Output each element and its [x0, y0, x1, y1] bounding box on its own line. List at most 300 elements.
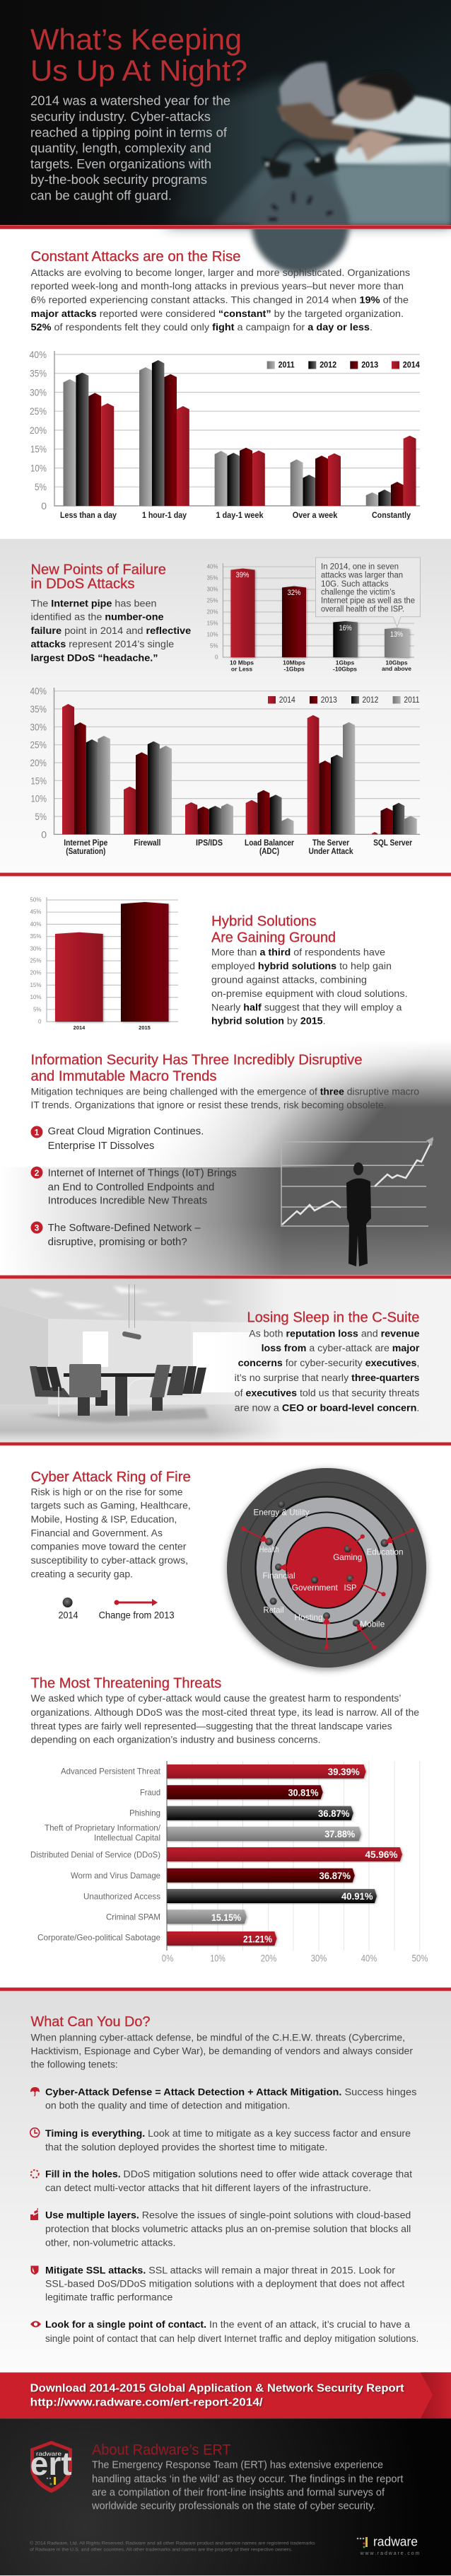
- hero photo: man awake in bed with alarm clock: [0, 0, 451, 274]
- text block: losing sleep: concerns for cyber-security executives,: [238, 1357, 419, 1368]
- bar: 10 Mbps to 1 Gbps, 32%: 32%: [287, 589, 301, 597]
- x axis labels: 2015: [139, 1024, 151, 1031]
- tenet 6: single point of contact: single point of contact that can help divert Internet traffic and deploy mitigation solutions.: [45, 2333, 418, 2344]
- hero intro text: [30, 93, 230, 202]
- y axis labels: 25%: [30, 405, 47, 417]
- y axis labels: 45%: [30, 909, 41, 916]
- x axis labels: (Saturation): [66, 848, 105, 856]
- hero intro text: reached a tipping point in terms of: [30, 125, 228, 139]
- tenet 3: fill in the holes: Fill in the holes. DDoS mitigation solutions need to offer wide attack coverage that: [45, 2168, 412, 2180]
- panel: download banner: [0, 2372, 451, 2418]
- tenet 4: multiple layers: [30, 2208, 411, 2248]
- y axis labels: [30, 897, 42, 1024]
- y axis labels: 40%: [30, 921, 41, 928]
- trend 2: [31, 1167, 237, 1207]
- bar: 10 Mbps to 1 Gbps, 32%: [282, 586, 306, 657]
- trend 1: Enterprise IT Dissolves: [48, 1140, 154, 1152]
- text block: ring of fire: Mobile, Hosting & ISP, Education,: [31, 1513, 177, 1525]
- text block: losing sleep: are now a CEO or board-level concern .: [235, 1402, 419, 1413]
- photo: businessman facing chart on concrete wall: [0, 1040, 451, 1275]
- panel: hybrid solutions: [30, 897, 408, 1031]
- legend: 2012: [320, 361, 336, 369]
- heading: hybrid solutions: Are Gaining Ground: [211, 930, 336, 946]
- text block: hybrid solutions: More than a third of respondents have: [211, 947, 385, 958]
- hero panel: [0, 0, 451, 274]
- y axis labels: 30%: [30, 721, 47, 732]
- trend 2: Internet of Internet of Things (IoT) Brings: [48, 1168, 237, 1179]
- y axis labels: 20%: [30, 424, 47, 436]
- tenet 5: mitigate ssl: Mitigate SSL attacks. SSL attacks will remain a major threat in 2015. Look for: [45, 2264, 395, 2275]
- icon: broken circle: [31, 2170, 39, 2178]
- x axis labels: 1Gbps: [336, 659, 354, 666]
- heading: macro trends: Information Security Has Three Incredibly Disruptive: [31, 1052, 362, 1068]
- threat labels: Advanced Persistent Threat: [61, 1767, 161, 1777]
- heading: threats: The Most Threatening Threats: [31, 1676, 221, 1692]
- trend 3: [31, 1221, 201, 1248]
- y axis labels: 5%: [35, 481, 47, 492]
- x axis labels: and above: [382, 665, 411, 672]
- text block: what can you do intro: Hacktivism, Espionage and Cyber War), be demanding of vendors and always consider: [31, 2045, 413, 2056]
- trend 2: 2: [35, 1168, 40, 1178]
- text block: ring of fire: Risk is high or on the rise for some: [31, 1486, 183, 1497]
- text block: hybrid solutions: hybrid solution by 2015.: [211, 1015, 326, 1026]
- text block: internet pipe: [31, 597, 191, 663]
- heading: ring of fire: Cyber Attack Ring of Fire: [31, 1469, 191, 1485]
- legend: 2011: [279, 361, 295, 369]
- change arrows: [242, 1527, 414, 1648]
- hero intro text: 2014 was a watershed year for the: [30, 93, 230, 108]
- hero intro text: security industry. Cyber-attacks: [30, 109, 211, 124]
- text block: macro trends: IT trends. Organizations that ignore or resist these trends, risk becoming obsolete.: [31, 1099, 386, 1111]
- tenet 4: multiple layers: Use multiple layers. Resolve the issues of single-point solutions with cloud-based: [45, 2209, 411, 2220]
- y axis labels: 15%: [206, 620, 218, 627]
- text block: constant attacks: 6% reported experiencing constant attacks. This changed in 2014 when 19% of the: [31, 294, 409, 305]
- y axis labels: [206, 563, 218, 661]
- text block: losing sleep: [235, 1327, 420, 1413]
- download link text: [30, 2383, 404, 2409]
- logo: radware: radware: [373, 2534, 418, 2548]
- logo: ERT shield: radware: [36, 2450, 62, 2457]
- x axis labels: -1Gbps: [283, 665, 305, 672]
- y axis labels: 35%: [30, 368, 47, 379]
- panel: about radware ert: [0, 2418, 451, 2576]
- bars: the server under attack: [308, 715, 355, 834]
- x axis labels: Internet Pipe: [64, 839, 107, 848]
- tenet 1: defense: Cyber-Attack Defense = Attack Detection + Attack Mitigation. Success hinges: [45, 2086, 416, 2098]
- panel: ring of fire: [31, 1468, 426, 1668]
- callout: larger than 10G: Internet pipe as well as the: [321, 596, 415, 605]
- x axis labels: Load Balancer: [245, 839, 294, 848]
- bar: advanced persistent threat: [167, 1764, 366, 1779]
- heading: constant attacks: Constant Attacks are on the Rise: [31, 249, 240, 265]
- text block: constant attacks: 52% of respondents felt they could only fight a campaign for a day or less.: [31, 321, 373, 333]
- y axis labels: 30%: [30, 386, 47, 398]
- logo: radware: [357, 2534, 420, 2556]
- y axis labels: 10%: [30, 463, 47, 474]
- x axis labels: [230, 659, 411, 672]
- heading: new points of failure: [31, 562, 166, 592]
- hero title: Us Up At Night?: [30, 54, 247, 87]
- sector dots: [265, 1501, 389, 1627]
- tenet 3: fill in the holes: [31, 2168, 412, 2193]
- bar: DDoS: [167, 1847, 402, 1861]
- y axis labels: 15%: [30, 444, 47, 455]
- y axis labels: 15%: [31, 775, 47, 786]
- text block: threats: We asked which type of cyber-attack would cause the greatest harm to respondents’: [31, 1692, 402, 1704]
- bar: worm and virus: 36.87%: [320, 1870, 351, 1881]
- tenet 2: timing: that the solution deployed provides the shortest time to mitigate.: [45, 2141, 327, 2152]
- x axis labels: [64, 839, 413, 856]
- x axis labels: 0%: [162, 1953, 173, 1964]
- x axis labels: Constantly: [372, 512, 411, 520]
- x axis labels: IPS/IDS: [196, 839, 223, 848]
- threat labels: Corporate/Geo-political Sabotage: [37, 1933, 160, 1943]
- bars: constantly: [366, 436, 416, 506]
- icon: layers: [30, 2208, 38, 2220]
- hero intro text: by-the-book security programs: [30, 172, 207, 187]
- text block: about: The Emergency Response Team (ERT) has extensive experience: [92, 2460, 383, 2471]
- icon: shield: [31, 2265, 38, 2275]
- hero title: What’s Keeping: [30, 23, 242, 56]
- text block: ring of fire: creating a security gap.: [31, 1568, 133, 1579]
- legend: 2014: [403, 361, 420, 369]
- text block: threats: organizations. Although DDoS was the most-cited threat type, its lead is narrow. All of the: [31, 1706, 419, 1718]
- x axis labels: 2014: [74, 1024, 86, 1031]
- bar: sabotage: 21.21%: [243, 1933, 272, 1944]
- legend: 2014: [279, 696, 295, 705]
- text block: internet pipe: The Internet pipe has been: [31, 597, 157, 608]
- x axis labels: 30%: [311, 1953, 327, 1964]
- heading: new points of failure: New Points of Failure: [31, 562, 166, 578]
- y axis labels: 20%: [30, 757, 47, 768]
- text block: hybrid solutions: employed hybrid solutions to help gain: [211, 960, 392, 971]
- y axis labels: 40%: [30, 686, 47, 697]
- text block: constant attacks: [31, 267, 410, 333]
- y axis labels: [30, 686, 47, 840]
- threat labels: [30, 1767, 161, 1943]
- bar: worm and virus: [167, 1869, 355, 1883]
- trend 2: Introduces Incredible New Threats: [48, 1196, 207, 1207]
- y axis labels: 25%: [206, 597, 218, 604]
- bars: load balancer: [246, 790, 294, 834]
- callout: larger than 10G: 10G. Such attacks: [321, 580, 389, 589]
- x axis labels: The Server: [312, 839, 349, 848]
- y axis labels: 35%: [30, 933, 41, 940]
- callout: larger than 10G: In 2014, one in seven: [321, 563, 399, 572]
- legend: 2013: [321, 696, 337, 705]
- sector labels: [253, 1508, 403, 1629]
- text block: threats: [31, 1692, 419, 1745]
- text block: constant attacks: Attacks are evolving to become longer, larger and more sophisticated. Organizations: [31, 267, 410, 278]
- hero intro text: can be caught off guard.: [30, 187, 172, 202]
- tenet 2: timing: Timing is everything. Look at time to mitigate as a key success factor and ensure: [45, 2127, 411, 2139]
- bar: 1 Gbps to 10 Gbps, 16%: [333, 621, 358, 657]
- legend: 2011: [404, 696, 419, 705]
- tenet 1: defense: [30, 2086, 416, 2111]
- threat labels: Intellectual Capital: [94, 1832, 160, 1842]
- text block: internet pipe: largest DDoS “headache.”: [31, 652, 158, 663]
- x axis labels: Less than a day: [60, 512, 117, 520]
- tenet 6: single point of contact: [30, 2318, 418, 2344]
- text block: what can you do intro: the following tenets:: [31, 2059, 118, 2070]
- y axis labels: [30, 349, 47, 512]
- x axis labels: Over a week: [293, 512, 338, 520]
- download link text: http://www.radware.com/ert-report-2014/: [30, 2397, 263, 2409]
- bar chart: attack size: [206, 563, 414, 672]
- trend 3: disruptive, promising or both?: [48, 1237, 187, 1248]
- text block: constant attacks: reported week-long and month-long attacks in previous years–but never more than: [31, 280, 404, 291]
- text block: threats: threat types are fairly well represented—suggesting that the threat landscape varies: [31, 1720, 392, 1731]
- x axis labels: 40%: [361, 1953, 377, 1964]
- sector labels: Health: [259, 1544, 279, 1554]
- x axis labels: [60, 512, 411, 520]
- y axis labels: 20%: [206, 608, 218, 616]
- panel: most threatening threats: [30, 1676, 428, 1964]
- text block: ring of fire: companies move toward the center: [31, 1541, 187, 1552]
- x axis labels: 10Gbps: [385, 659, 408, 666]
- tenet 1: defense: on both the quality and time of detection and mitigation.: [45, 2100, 290, 2111]
- text block: hybrid solutions: on-premise equipment with cloud solutions.: [211, 988, 408, 999]
- bar: theft of information: 37.88%: [324, 1828, 356, 1839]
- bar: theft of information: [167, 1827, 361, 1841]
- text block: what can you do intro: When planning cyber-attack defense, be mindful of the C.H.E.W. threats (Cybercrime,: [31, 2031, 405, 2043]
- copyright: [30, 2541, 316, 2552]
- y axis labels: 10%: [206, 631, 218, 638]
- text block: about: are a compilation of their front-line insights and formal surveys of: [92, 2488, 385, 2499]
- heading: macro trends: and Immutable Macro Trends: [31, 1069, 216, 1085]
- y axis labels: 35%: [206, 574, 218, 582]
- y axis labels: 25%: [30, 958, 41, 964]
- y axis labels: 30%: [206, 586, 218, 593]
- bar chart: attack duration by year: [30, 349, 420, 520]
- logo: ERT shield: ert: [30, 2445, 72, 2482]
- text block: about: [91, 2460, 403, 2512]
- copyright: of Radware in the U.S. and other countries. All other trademarks and names are the property of their respective owners.: [30, 2547, 293, 2552]
- bar: fraud: 30.81%: [288, 1787, 319, 1798]
- tenet 5: mitigate ssl: legitimate traffic performance: [45, 2292, 173, 2303]
- x axis labels: [74, 1024, 151, 1031]
- arrow: banner chevron: [421, 2372, 451, 2418]
- tenet 6: single point of contact: Look for a single point of contact. In the event of an attack, it’s crucial to have a: [45, 2318, 410, 2330]
- bar: sabotage: [167, 1931, 277, 1946]
- bar: unauthorized access: 40.91%: [341, 1890, 373, 1902]
- text block: internet pipe: attacks represent 2014’s single: [31, 638, 174, 649]
- sector labels: Financial: [263, 1571, 295, 1581]
- panel: constant attacks: [30, 249, 420, 520]
- hero intro text: targets. Even organizations with: [30, 156, 211, 171]
- x axis labels: SQL Server: [373, 839, 413, 848]
- x axis labels: Under Attack: [308, 848, 353, 856]
- bars: less than a day: [64, 373, 114, 506]
- tenet 2: timing: [30, 2127, 411, 2152]
- bar: 10 Mbps or less, 39%: [230, 569, 255, 657]
- text block: macro trends: Mitigation techniques are being challenged with the emergence of three disruptive macro: [31, 1085, 419, 1097]
- sector labels: Energy & Utility: [253, 1508, 310, 1518]
- download link text: Download 2014-2015 Global Application & Network Security Report: [30, 2383, 404, 2395]
- legend: 2013: [361, 361, 378, 369]
- bar: phishing: 36.87%: [318, 1808, 350, 1819]
- trend 1: [31, 1126, 204, 1152]
- x axis labels: 10Mbps: [283, 659, 305, 666]
- bar: 2014: [55, 932, 103, 1022]
- y axis labels: 0: [41, 828, 47, 840]
- x axis labels: 20%: [261, 1953, 276, 1964]
- hero intro text: quantity, length, complexity and: [30, 141, 211, 156]
- legend: 2012: [362, 696, 378, 705]
- text block: internet pipe: failure point in 2014 and reflective: [31, 625, 191, 636]
- text block: losing sleep: loss from a cyber-attack are major: [262, 1342, 420, 1353]
- y axis labels: 35%: [30, 703, 47, 715]
- text block: ring of fire: susceptibility to cyber-attack grows,: [31, 1554, 188, 1566]
- panel: new points of failure: [0, 539, 451, 873]
- tenet 3: fill in the holes: can detect multi-vector attacks that hit different layers of the infrastructure.: [45, 2182, 371, 2193]
- bars: over a week: [291, 454, 341, 506]
- x axis labels: 1 day-1 week: [216, 512, 264, 520]
- trend 1: 1: [35, 1128, 40, 1138]
- heading: what can you do: What Can You Do?: [31, 2014, 150, 2030]
- bar chart: failure points: [30, 686, 420, 856]
- target chart: ring of fire: [227, 1468, 426, 1668]
- threat labels: Distributed Denial of Service (DDoS): [30, 1849, 160, 1859]
- y axis labels: 25%: [30, 739, 47, 751]
- tenet 4: multiple layers: other, non-volumetric attacks.: [45, 2236, 175, 2248]
- callout: larger than 10G: challenge the victim’s: [321, 589, 395, 597]
- callout: larger than 10G: overall health of the ISP.: [321, 605, 404, 613]
- bars: internet pipe: [62, 704, 110, 834]
- text block: about: handling attacks ‘in the wild’ as they occur. The findings in the report: [92, 2473, 403, 2485]
- heading: new points of failure: in DDoS Attacks: [31, 577, 134, 592]
- y axis labels: 5%: [210, 642, 218, 649]
- bar: 10 Gbps and above, 13%: [385, 628, 409, 657]
- bar: 2015: [121, 902, 168, 1022]
- text block: internet pipe: identified as the number-one: [31, 611, 164, 622]
- bars: SQL server: [372, 803, 417, 834]
- photo: empty boardroom: [0, 1279, 451, 1442]
- sector labels: Government: [292, 1583, 338, 1593]
- icon: umbrella: [30, 2087, 40, 2096]
- text block: hybrid solutions: Nearly half suggest that they will employ a: [211, 1001, 402, 1012]
- bars: IPS/IDS: [185, 802, 233, 834]
- y axis labels: 15%: [30, 982, 41, 988]
- text block: losing sleep: As both reputation loss and revenue: [249, 1327, 420, 1339]
- legend: [267, 361, 420, 369]
- text block: about: worldwide security professionals on the state of cyber security.: [91, 2501, 375, 2512]
- threat labels: Theft of Proprietary Information/: [45, 1823, 161, 1832]
- panel: losing sleep: [0, 1279, 451, 1442]
- callout: larger than 10G: [315, 558, 420, 627]
- bar chart: threat types: [30, 1761, 428, 1964]
- x axis labels: or Less: [231, 665, 252, 672]
- bar: criminal spam: [167, 1910, 247, 1924]
- bar: criminal spam: 15.15%: [211, 1912, 241, 1923]
- bars: 1 hour-1 day: [139, 360, 189, 506]
- y axis labels: 10%: [30, 994, 41, 1000]
- sector labels: Mobile: [360, 1619, 385, 1629]
- y axis labels: 5%: [35, 811, 47, 822]
- logo: radware: www.radware.com: [360, 2551, 420, 2556]
- legend: ring of fire: [58, 1598, 175, 1621]
- legend: ring of fire: Change from 2013: [99, 1610, 175, 1621]
- text block: ring of fire: targets such as Gaming, Healthcare,: [31, 1500, 191, 1511]
- x axis labels: 10%: [210, 1953, 226, 1964]
- x axis labels: 10 Mbps: [230, 659, 254, 666]
- text block: losing sleep: it’s no surprise that nearly three-quarters: [235, 1372, 420, 1383]
- y axis labels: 10%: [31, 793, 47, 804]
- text block: threats: depending on each organization’s industry and business concerns.: [31, 1733, 321, 1745]
- text block: hybrid solutions: ground against attacks, combining: [211, 974, 367, 985]
- bar chart: hybrid adoption: [30, 897, 178, 1031]
- text block: what can you do intro: [31, 2031, 413, 2070]
- sector labels: Gaming: [333, 1552, 362, 1562]
- text block: constant attacks: major attacks reported were considered “constant” by the targeted organization.: [31, 308, 404, 319]
- heading: hybrid solutions: Hybrid Solutions: [211, 913, 317, 929]
- text block: losing sleep: of executives told us that security threats: [235, 1387, 419, 1398]
- sector labels: Retail: [263, 1605, 284, 1615]
- text block: hybrid solutions: [211, 947, 408, 1026]
- bars: firewall: [124, 741, 172, 834]
- x axis labels: 50%: [411, 1953, 428, 1964]
- y axis labels: 40%: [30, 349, 47, 360]
- threat labels: Phishing: [129, 1808, 160, 1818]
- x axis labels: 1 hour-1 day: [142, 512, 187, 520]
- trend 3: 3: [35, 1223, 40, 1232]
- text block: ring of fire: Financial and Government. As: [31, 1527, 163, 1538]
- trend 2: an End to Controlled Endpoints and: [48, 1182, 214, 1193]
- text block: ring of fire: [31, 1486, 191, 1579]
- y axis labels: 5%: [33, 1006, 41, 1012]
- text block: macro trends: [31, 1085, 419, 1111]
- y axis labels: 0: [41, 500, 47, 512]
- legend: [268, 696, 419, 705]
- sector labels: Hosting: [294, 1612, 322, 1622]
- trend 1: Great Cloud Migration Continues.: [48, 1126, 204, 1137]
- heading: hybrid solutions: [211, 913, 336, 946]
- tenet 4: multiple layers: protection that blocks volumetric attacks plus an on-premise solution that blocks all: [45, 2223, 411, 2234]
- hero title: [30, 23, 247, 87]
- tenet 5: mitigate ssl: [31, 2264, 404, 2303]
- copyright: © 2014 Radware, Ltd. All Rights Reserved. Radware and all other Radware product and service names are registered trademarks: [30, 2541, 316, 2546]
- y axis labels: 50%: [30, 897, 41, 903]
- y axis labels: 40%: [206, 563, 218, 570]
- x axis labels: (ADC): [259, 848, 279, 856]
- bar: 10 Gbps and above, 13%: 13%: [390, 630, 403, 639]
- heading: losing sleep: Losing Sleep in the C-Suite: [247, 1310, 419, 1325]
- panel: macro trends: [0, 1040, 451, 1275]
- x axis labels: [162, 1953, 428, 1964]
- heading: macro trends: [31, 1052, 362, 1085]
- bar: advanced persistent threat: 39.39%: [328, 1766, 360, 1777]
- callout: larger than 10G: attacks was larger than: [321, 572, 403, 580]
- x axis labels: Firewall: [134, 839, 160, 848]
- x axis labels: -10Gbps: [333, 665, 357, 672]
- sector labels: ISP: [344, 1583, 356, 1593]
- icon: clock: [30, 2128, 40, 2137]
- bar: 1 Gbps to 10 Gbps, 16%: 16%: [339, 624, 352, 633]
- bar: 10 Mbps or less, 39%: 39%: [236, 571, 250, 579]
- trend 3: The Software-Defined Network –: [48, 1223, 201, 1234]
- sector labels: Education: [366, 1547, 403, 1556]
- threat labels: Criminal SPAM: [106, 1912, 160, 1922]
- y axis labels: 30%: [30, 945, 41, 952]
- heading: about: About Radware’s ERT: [92, 2442, 231, 2458]
- legend: ring of fire: 2014: [58, 1610, 78, 1621]
- panel: what can you do: [0, 1991, 451, 2373]
- bar: fraud: [167, 1785, 323, 1799]
- bars: 1 day-1 week: [215, 448, 265, 506]
- threat labels: Unauthorized Access: [83, 1891, 160, 1901]
- y axis labels: 0: [38, 1019, 42, 1024]
- threat labels: Worm and Virus Damage: [71, 1871, 160, 1881]
